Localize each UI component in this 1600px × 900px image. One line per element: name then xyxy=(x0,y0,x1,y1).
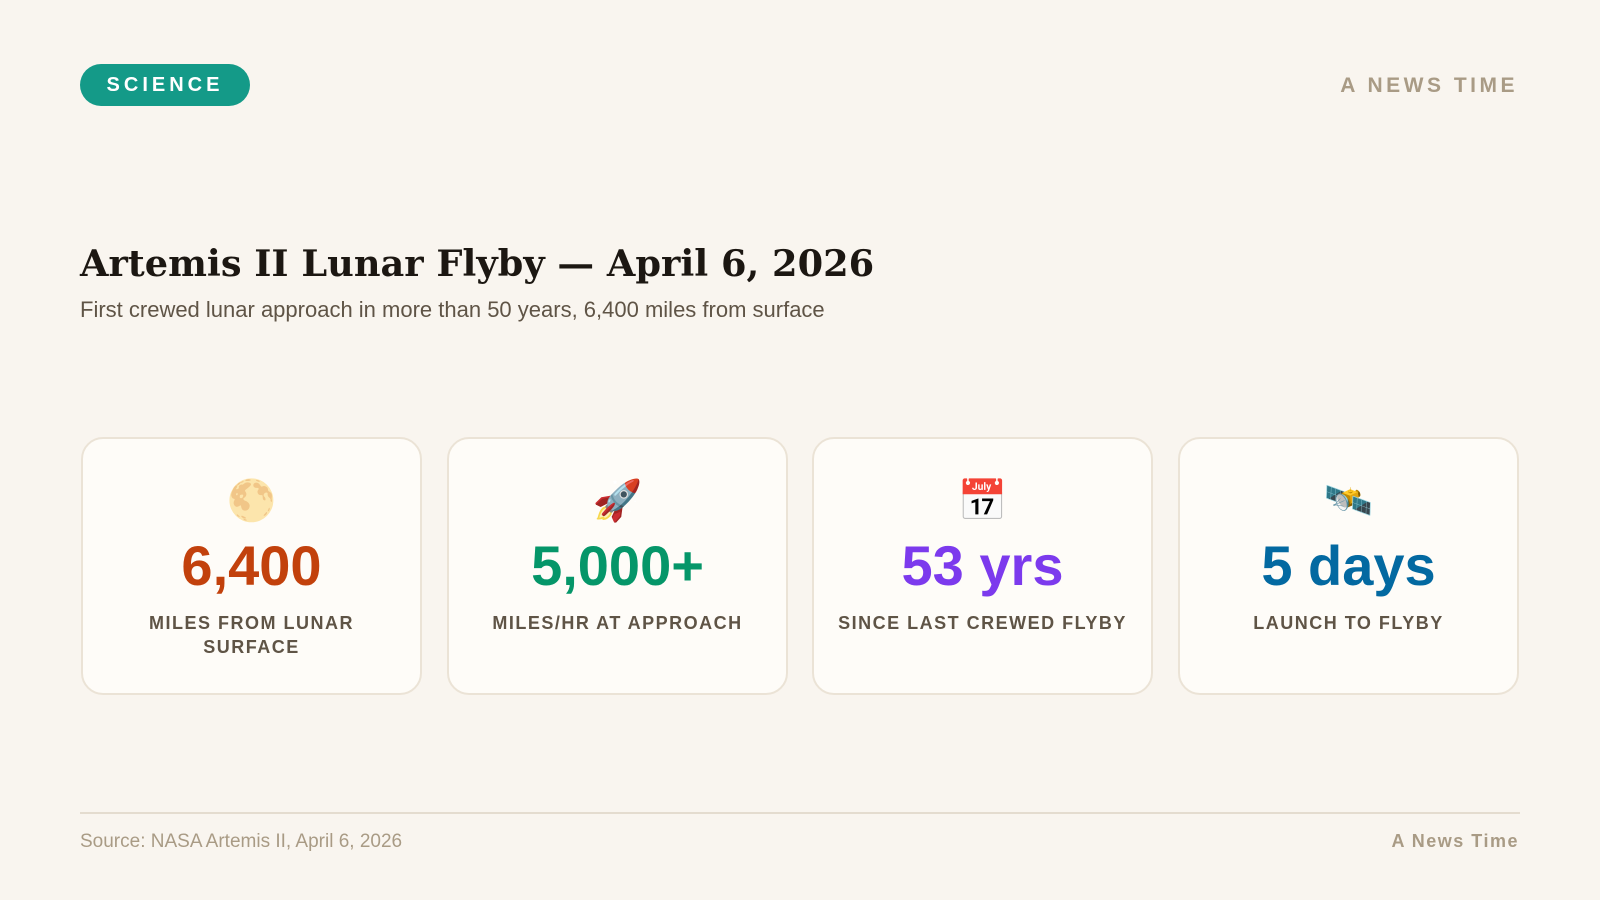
category pill: SCIENCE xyxy=(107,74,223,96)
icon: moon: 🌕 xyxy=(227,477,276,524)
icon: calendar: 📅 xyxy=(958,477,1007,524)
footer brand: A News Time xyxy=(1391,831,1519,851)
card: speed xyxy=(447,437,788,695)
label: LAUNCH TO FLYBY xyxy=(1253,613,1444,633)
icon: rocket: 🚀 xyxy=(593,477,642,524)
label: SINCE LAST CREWED FLYBY xyxy=(838,613,1127,633)
card: distance xyxy=(81,437,422,695)
icon: satellite: 🛰️ xyxy=(1324,477,1373,524)
label: MILES FROM LUNAR SURFACE xyxy=(149,613,354,657)
label: MILES/HR AT APPROACH xyxy=(492,613,743,633)
category pill xyxy=(80,64,250,106)
source: Source: NASA Artemis II, April 6, 2026 xyxy=(80,831,402,852)
title: Artemis II Lunar Flyby — April 6, 2026 xyxy=(80,242,874,285)
stat: 6,400: 6,400 xyxy=(181,534,322,597)
card: days xyxy=(1178,437,1519,695)
stat: 5,000+: 5,000+ xyxy=(531,534,704,597)
stat: 53 yrs: 53 yrs xyxy=(902,534,1063,597)
card: years xyxy=(812,437,1153,695)
subtitle: First crewed lunar approach in more than 50 years, 6,400 miles from surface xyxy=(80,297,825,322)
stat: 5 days: 5 days xyxy=(1261,534,1436,597)
brand: A NEWS TIME xyxy=(1340,74,1518,97)
